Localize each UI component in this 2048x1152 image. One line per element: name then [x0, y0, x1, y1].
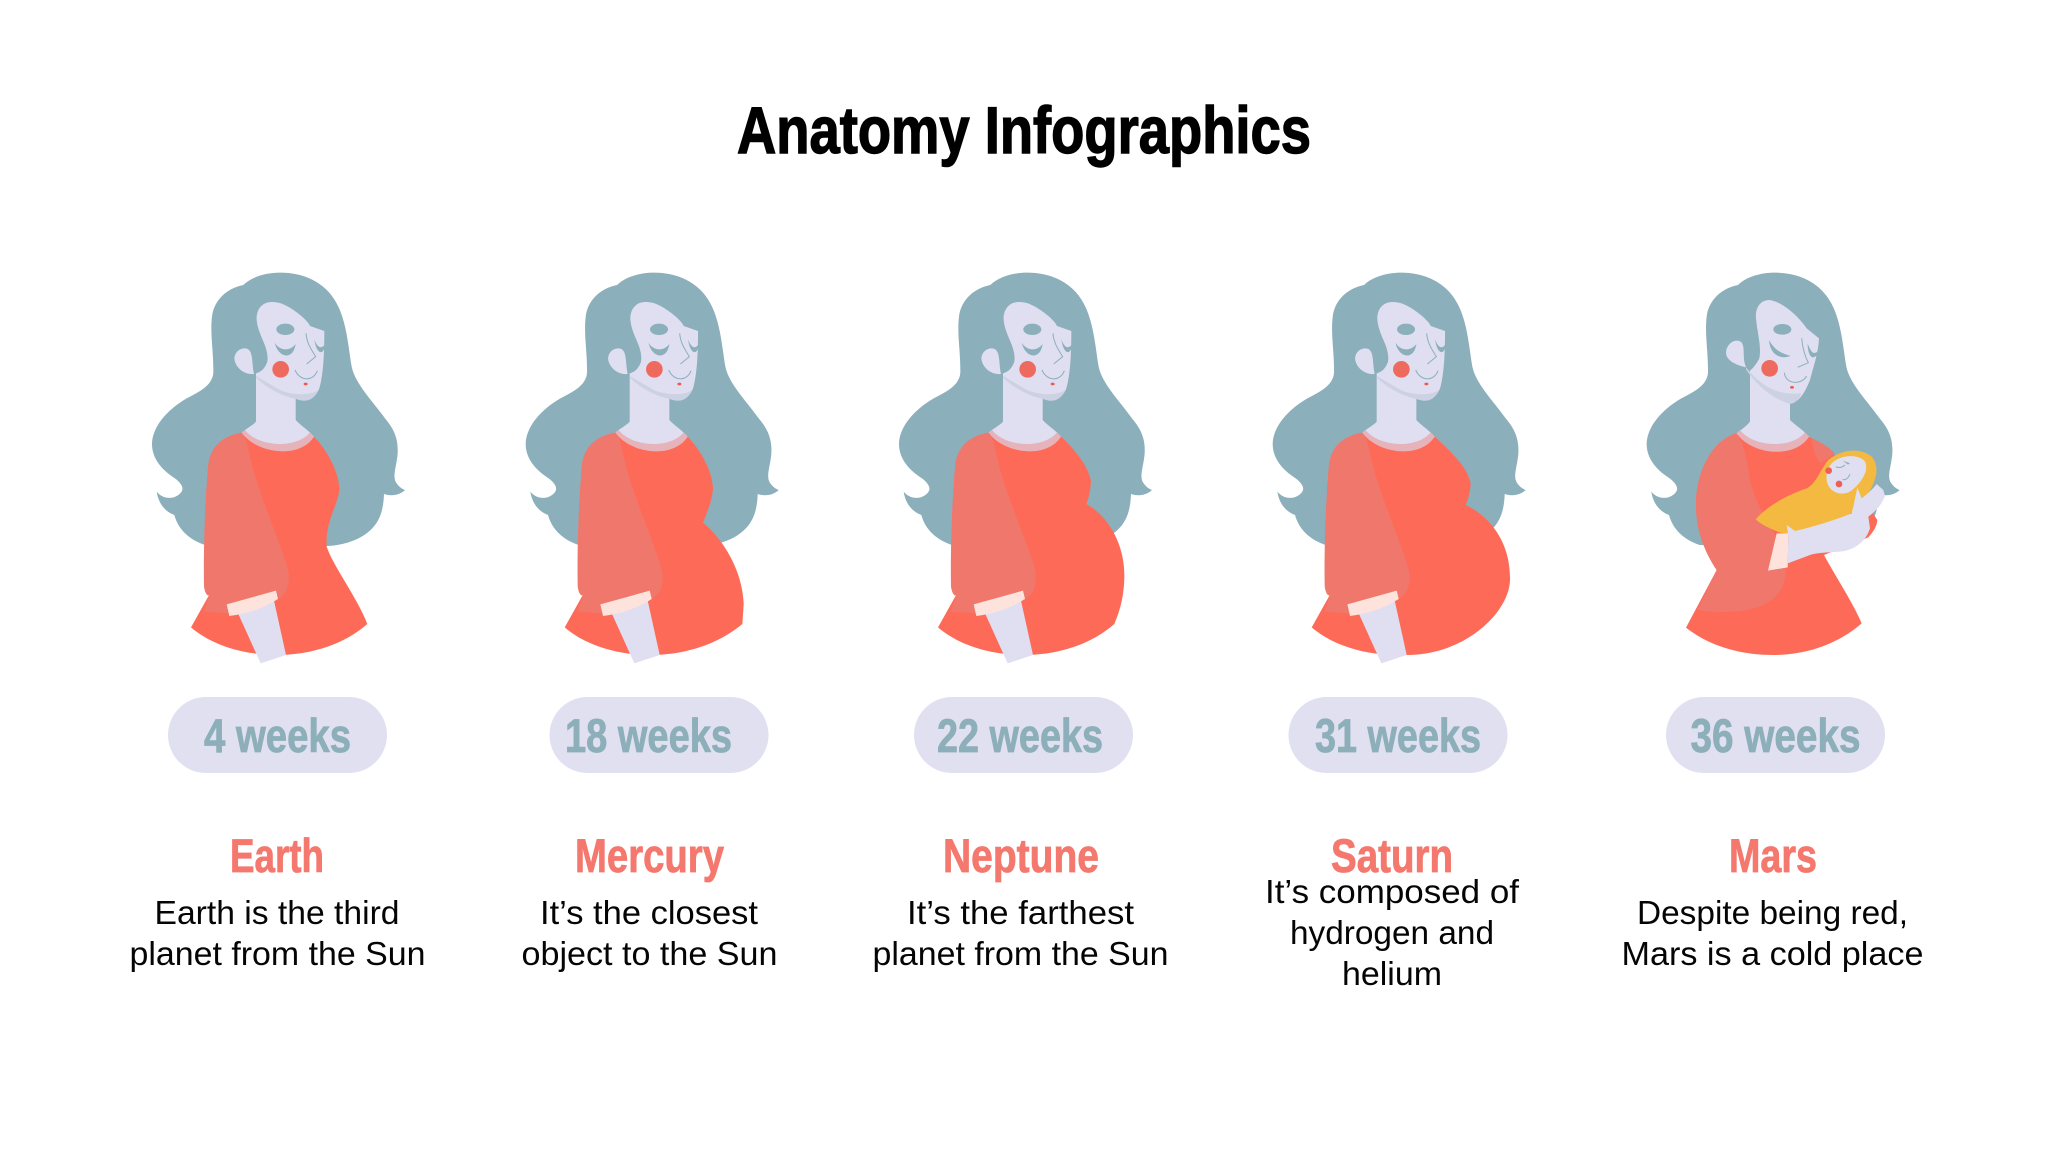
pill: 22 weeks: 22 weeks [937, 709, 1103, 762]
description: Neptune: It’s the farthest [907, 895, 1135, 932]
heading: Mars: Mars [1729, 829, 1817, 882]
pill: 22 weeks [914, 697, 1133, 773]
description: Neptune [872, 895, 1168, 973]
pill: 36 weeks [1666, 697, 1885, 773]
title: Anatomy Infographics [737, 93, 1311, 167]
description: Mercury [522, 895, 778, 973]
description: Mercury: It’s the closest [540, 895, 759, 932]
column: 22 weeks / Neptune [872, 273, 1168, 973]
description: Mars: Mars is a cold place [1622, 936, 1924, 973]
pill: 18 weeks [550, 697, 768, 773]
heading: Neptune: Neptune [943, 829, 1099, 882]
illustration: woman at 31 weeks [1273, 273, 1526, 663]
column: 4 weeks / Earth [130, 273, 426, 973]
translucent sleeve [1696, 433, 1786, 612]
pill: 31 weeks: 31 weeks [1315, 709, 1481, 762]
pill: 4 weeks [168, 697, 387, 773]
pill: 36 weeks: 36 weeks [1690, 709, 1860, 762]
cuff and supporting arm [1768, 484, 1885, 571]
heading: Mercury: Mercury [575, 829, 724, 882]
pill: 4 weeks: 4 weeks [204, 709, 351, 762]
illustration: woman at 22 weeks [899, 273, 1152, 663]
pill: 18 weeks: 18 weeks [565, 709, 732, 762]
illustration: mother holding baby [1647, 273, 1900, 655]
illustration: woman at 4 weeks [152, 273, 405, 663]
dress [1686, 433, 1877, 655]
description: Saturn [1265, 874, 1520, 993]
illustration: woman at 18 weeks [526, 273, 779, 663]
baby in yellow blanket [1756, 451, 1876, 535]
description: Mars: Despite being red, [1637, 895, 1908, 932]
description: Earth [130, 895, 426, 973]
column: 18 weeks / Mercury [522, 273, 779, 973]
heading: Earth: Earth [230, 829, 324, 882]
pill: 31 weeks [1288, 697, 1508, 773]
description: Saturn: It’s composed of [1265, 874, 1520, 911]
neck and face [1726, 300, 1819, 452]
description: Mars [1622, 895, 1924, 973]
column: 31 weeks / Saturn [1265, 273, 1526, 993]
column: 36 weeks / Mars [1622, 273, 1924, 973]
description: Earth: Earth is the third [154, 895, 400, 932]
heading: Saturn: Saturn [1331, 829, 1453, 882]
description: Neptune: planet from the Sun [872, 936, 1168, 973]
description: Saturn: helium [1342, 956, 1442, 993]
description: Saturn: hydrogen and [1290, 915, 1494, 952]
description: Mercury: object to the Sun [522, 936, 778, 973]
description: Earth: planet from the Sun [130, 936, 426, 973]
